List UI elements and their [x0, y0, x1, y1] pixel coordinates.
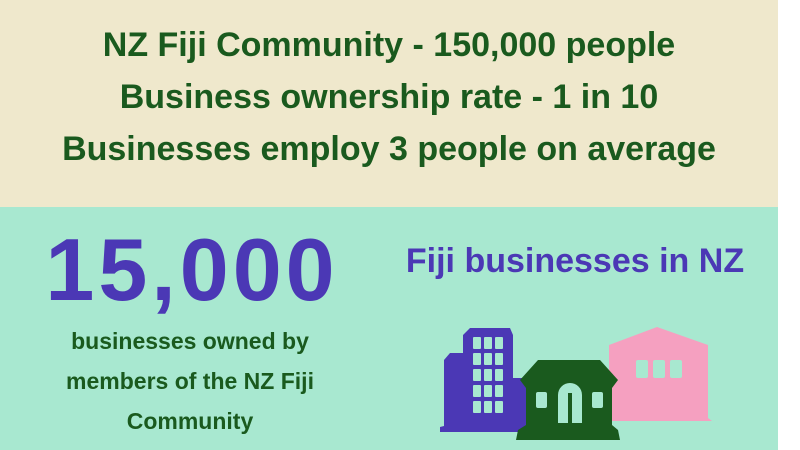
description: businesses owned by [71, 328, 309, 354]
icon: pink building [609, 327, 712, 421]
panel: top stats [0, 0, 778, 207]
icon: purple tower [440, 328, 536, 432]
icon: green house [516, 360, 620, 440]
heading: Fiji businesses in NZ: Fiji businesses in NZ [406, 242, 744, 280]
panel: bottom [0, 207, 778, 450]
stat line 2: Business ownership rate - 1 in 10 [120, 78, 658, 116]
description: members of the NZ Fiji [66, 368, 314, 394]
description: Community [127, 408, 253, 434]
description [66, 328, 314, 434]
big number: 15,000 [45, 220, 339, 319]
stat line 1: NZ Fiji Community - 150,000 people [103, 26, 675, 64]
stat line 3: Businesses employ 3 people on average [62, 130, 716, 168]
